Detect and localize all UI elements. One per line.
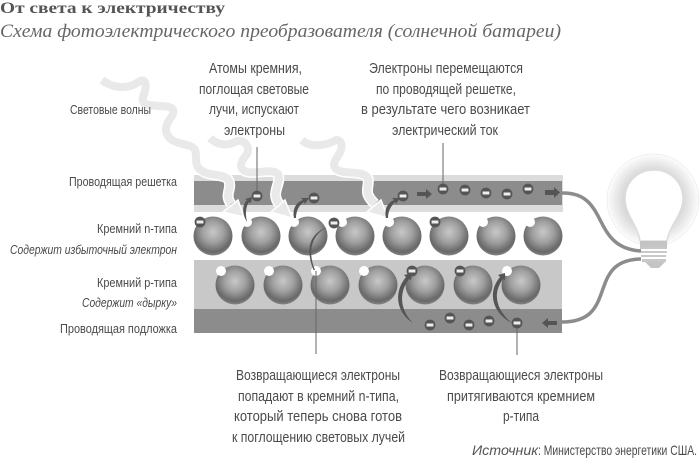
p-type silicon band: [194, 260, 562, 309]
callout: returning electrons attracted: [439, 367, 603, 425]
callout: electrons move: в результате чего возникает: [361, 101, 530, 118]
callout: returning electrons enter n-type: который теперь снова готов: [234, 408, 402, 425]
electrons in grid: [438, 184, 533, 199]
label: conducting grid: Проводящая решетка: [69, 174, 178, 189]
n-type silicon atoms: [194, 216, 562, 256]
electrons in atoms: [195, 191, 465, 276]
callout: atoms emit electrons: Атомы кремния,: [209, 60, 302, 77]
callout: atoms emit electrons: лучи, испускают: [209, 101, 299, 118]
conducting base band: [194, 309, 562, 333]
callout: returning electrons attracted: притягиваются кремнием: [447, 388, 595, 405]
label: excess electron: Содержит избыточный электрон: [10, 242, 177, 257]
title: От света к электричеству: [0, 0, 225, 17]
wires: [562, 193, 641, 322]
light wave 1: [102, 80, 244, 217]
callout: atoms emit electrons: поглощая световые: [199, 81, 309, 98]
callout: electrons move: Электроны перемещаются: [369, 60, 523, 77]
light bulb: [607, 154, 699, 268]
callout: electrons move: электрический ток: [392, 122, 498, 139]
p-type silicon atoms: [216, 266, 540, 304]
callout: atoms emit electrons: электроны: [224, 122, 285, 139]
callout: electrons move: по проводящей решетке,: [376, 81, 516, 98]
callout: atoms emit electrons: [199, 60, 309, 139]
callout: returning electrons attracted: p-типа: [503, 408, 540, 425]
curved electron arrows: [243, 197, 512, 323]
label: light waves: Световые волны: [70, 102, 151, 117]
callout: returning electrons attracted: Возвращающиеся электроны: [439, 367, 603, 384]
callout: returning electrons enter n-type: [232, 367, 405, 446]
conducting grid band: [194, 175, 563, 212]
source: Источник: [472, 442, 539, 458]
flow arrows: [417, 187, 560, 328]
light wave 3: [302, 140, 388, 218]
callout: returning electrons enter n-type: попадают в кремний n-типа,: [238, 388, 399, 405]
electrons in base: [425, 313, 522, 330]
label: hole: Содержит «дырку»: [82, 295, 177, 310]
callout: electrons move: [361, 60, 530, 139]
label: conducting base: Проводящая подложка: [60, 321, 178, 336]
callout: returning electrons enter n-type: Возвращающиеся электроны: [236, 367, 400, 384]
annotation lines: [257, 143, 517, 355]
holes: [216, 217, 535, 276]
subtitle: Схема фотоэлектрического преобразователя (солнечной батареи): [0, 21, 561, 42]
label: n-type silicon: Кремний n-типа: [97, 221, 178, 236]
label: p-type silicon: Кремний p-типа: [97, 275, 178, 290]
callout: returning electrons enter n-type: к поглощению световых лучей: [232, 429, 405, 446]
source: [472, 442, 697, 458]
light wave 2: [210, 138, 292, 218]
